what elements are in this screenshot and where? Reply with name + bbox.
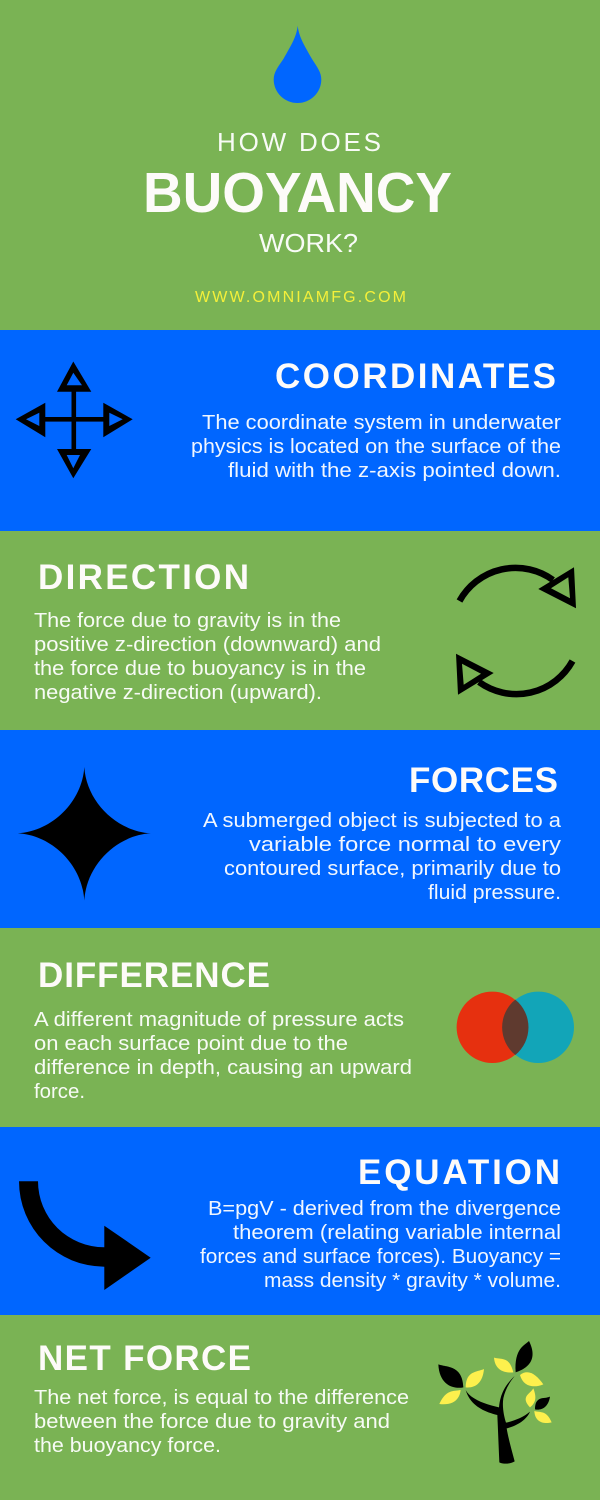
title: work: WORK? xyxy=(259,228,358,258)
text: forces body: A submerged object is subjected to a xyxy=(203,809,562,832)
text: net force body: between the force due to gravity and xyxy=(34,1410,390,1433)
text: equation body: B=pgV - derived from the divergence xyxy=(208,1197,561,1220)
text: coordinates body: physics is located on the surface of the xyxy=(191,435,561,458)
text: equation body: theorem (relating variable internal xyxy=(233,1221,561,1244)
panel: equation xyxy=(0,1127,600,1315)
title: buoyancy: BUOYANCY xyxy=(143,161,452,225)
text: direction body xyxy=(34,609,381,704)
text: forces body: contoured surface, primarily due to xyxy=(224,857,561,880)
text: direction body: negative z-direction (upward). xyxy=(34,681,322,704)
text: forces body: fluid pressure. xyxy=(428,881,561,904)
text: equation body: mass density * gravity * volume. xyxy=(264,1269,561,1292)
icon: curved arrow xyxy=(19,1181,151,1290)
title: how does: HOW DOES xyxy=(217,127,381,157)
text: difference body: difference in depth, causing an upward xyxy=(34,1056,412,1079)
panel: direction xyxy=(0,531,600,730)
panel: coordinates xyxy=(0,330,600,531)
website url: WWW.OMNIAMFG.COM xyxy=(195,289,406,306)
text: equation body xyxy=(200,1197,561,1292)
text: net force body xyxy=(34,1386,409,1457)
text: coordinates body xyxy=(191,411,561,482)
icon: water drop xyxy=(274,26,321,103)
text: direction body: positive z-direction (downward) and xyxy=(34,633,381,656)
text: difference body xyxy=(34,1008,412,1103)
text: coordinates body: The coordinate system in underwater xyxy=(202,411,561,434)
icon: four-way arrows xyxy=(16,362,133,478)
text: forces body xyxy=(203,809,562,904)
text: difference body: A different magnitude of pressure acts xyxy=(34,1008,404,1031)
heading: difference: DIFFERENCE xyxy=(38,956,270,995)
heading: equation: EQUATION xyxy=(358,1153,560,1192)
text: direction body: the force due to buoyancy is in the xyxy=(34,657,366,680)
panel: difference xyxy=(0,928,600,1127)
heading: direction: DIRECTION xyxy=(38,558,249,597)
text: difference body: on each surface point due to the xyxy=(34,1032,348,1055)
icon: tree with leaves xyxy=(438,1341,552,1464)
icon: overlapping circles xyxy=(457,992,574,1063)
icon: cycle arrows xyxy=(456,567,576,695)
text: equation body: forces and surface forces). Buoyancy = xyxy=(200,1245,561,1268)
text: direction body: The force due to gravity is in the xyxy=(34,609,341,632)
text: net force body: The net force, is equal to the difference xyxy=(34,1386,409,1409)
panel: header xyxy=(0,0,600,330)
text: net force body: the buoyancy force. xyxy=(34,1434,221,1457)
heading: coordinates: COORDINATES xyxy=(275,357,556,396)
heading: net force: NET FORCE xyxy=(38,1339,251,1378)
icon: four-point star xyxy=(18,767,151,900)
text: coordinates body: fluid with the z-axis pointed down. xyxy=(228,459,561,482)
heading: forces: FORCES xyxy=(409,761,558,800)
panel: forces xyxy=(0,730,600,928)
text: forces body: variable force normal to every xyxy=(249,833,562,856)
text: difference body: force. xyxy=(34,1080,85,1103)
panel: net force xyxy=(0,1315,600,1500)
